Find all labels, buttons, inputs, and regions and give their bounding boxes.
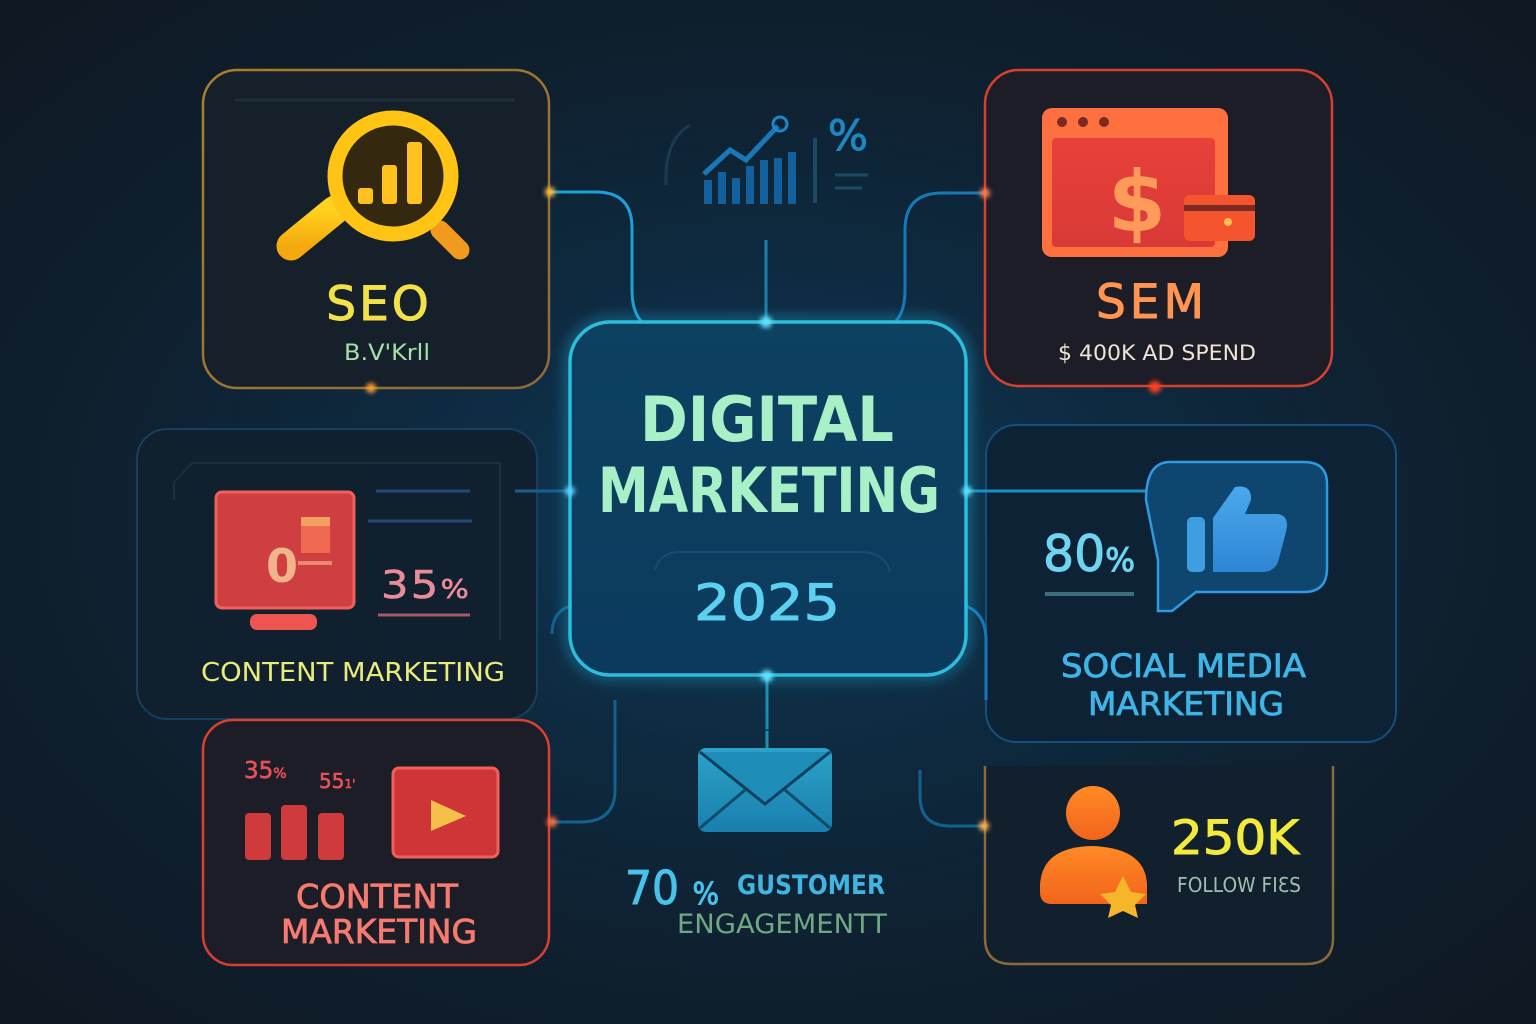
stat: ad spend: $ 400K AD SPEND [1058, 341, 1256, 365]
icon: person with star [1040, 786, 1147, 918]
heading: social media marketing: SOCIAL MEDIA [1061, 647, 1306, 685]
icon: video play [393, 768, 498, 857]
panel: social media marketing [986, 425, 1396, 742]
heading: social media marketing [1061, 647, 1306, 723]
label: customer: GUSTOMER [737, 870, 885, 901]
icon: monitor: 0 [266, 539, 298, 593]
label: engagement: ENGAGEMENTT [677, 909, 887, 940]
heading: social media marketing: MARKETING [1088, 685, 1284, 723]
icon: thumbs up speech bubble [1146, 462, 1327, 611]
heading: content marketing: MARKETING [281, 912, 477, 951]
heading: content marketing [281, 877, 477, 951]
label: followers: FOLLOW FIƐS [1177, 873, 1301, 897]
heading: digital marketing [598, 383, 940, 527]
icon: envelope [698, 748, 832, 832]
panel: center [570, 322, 966, 675]
panel: center glow [570, 322, 966, 675]
heading: digital marketing: DIGITAL [640, 383, 894, 456]
lines above stat [368, 491, 472, 521]
heading: content marketing: CONTENT MARKETING [201, 658, 505, 688]
stat: 70%: 70 % [625, 861, 719, 915]
icon: growth chart and percent: % [828, 111, 868, 160]
stat: 250K: 250K [1171, 811, 1300, 866]
heading: SEO: SEO [326, 277, 432, 332]
heading: digital marketing: MARKETING [598, 454, 940, 527]
panel: video content marketing [203, 720, 549, 965]
stat: 35%: 35 % [381, 563, 471, 607]
panel: email engagement [625, 730, 887, 940]
panel: SEM [985, 70, 1332, 386]
connector nodes [366, 187, 1161, 831]
icon: monitor [216, 492, 354, 630]
bar chart [244, 758, 355, 860]
icon: browser window with dollar and card: $ [1108, 153, 1166, 251]
heading: SEM: SEM [1096, 275, 1208, 330]
stat: 80%: 80% [1043, 525, 1135, 583]
connector lines [515, 192, 1146, 826]
icon: browser window with dollar and card [1042, 108, 1255, 257]
icon: magnifying glass with bars [291, 118, 460, 250]
heading: content marketing: CONTENT [296, 877, 459, 916]
bar chart: 35% [244, 758, 287, 784]
stat: SEO: B.V'Krll [344, 341, 430, 366]
icon: growth chart and percent [666, 111, 868, 204]
panel: SEO [203, 70, 549, 388]
panel: followers [985, 766, 1333, 964]
year: 2025 [694, 574, 840, 632]
decorative arc [655, 552, 890, 572]
panel: content marketing upper [137, 429, 537, 719]
bar chart: 551' [319, 769, 355, 793]
